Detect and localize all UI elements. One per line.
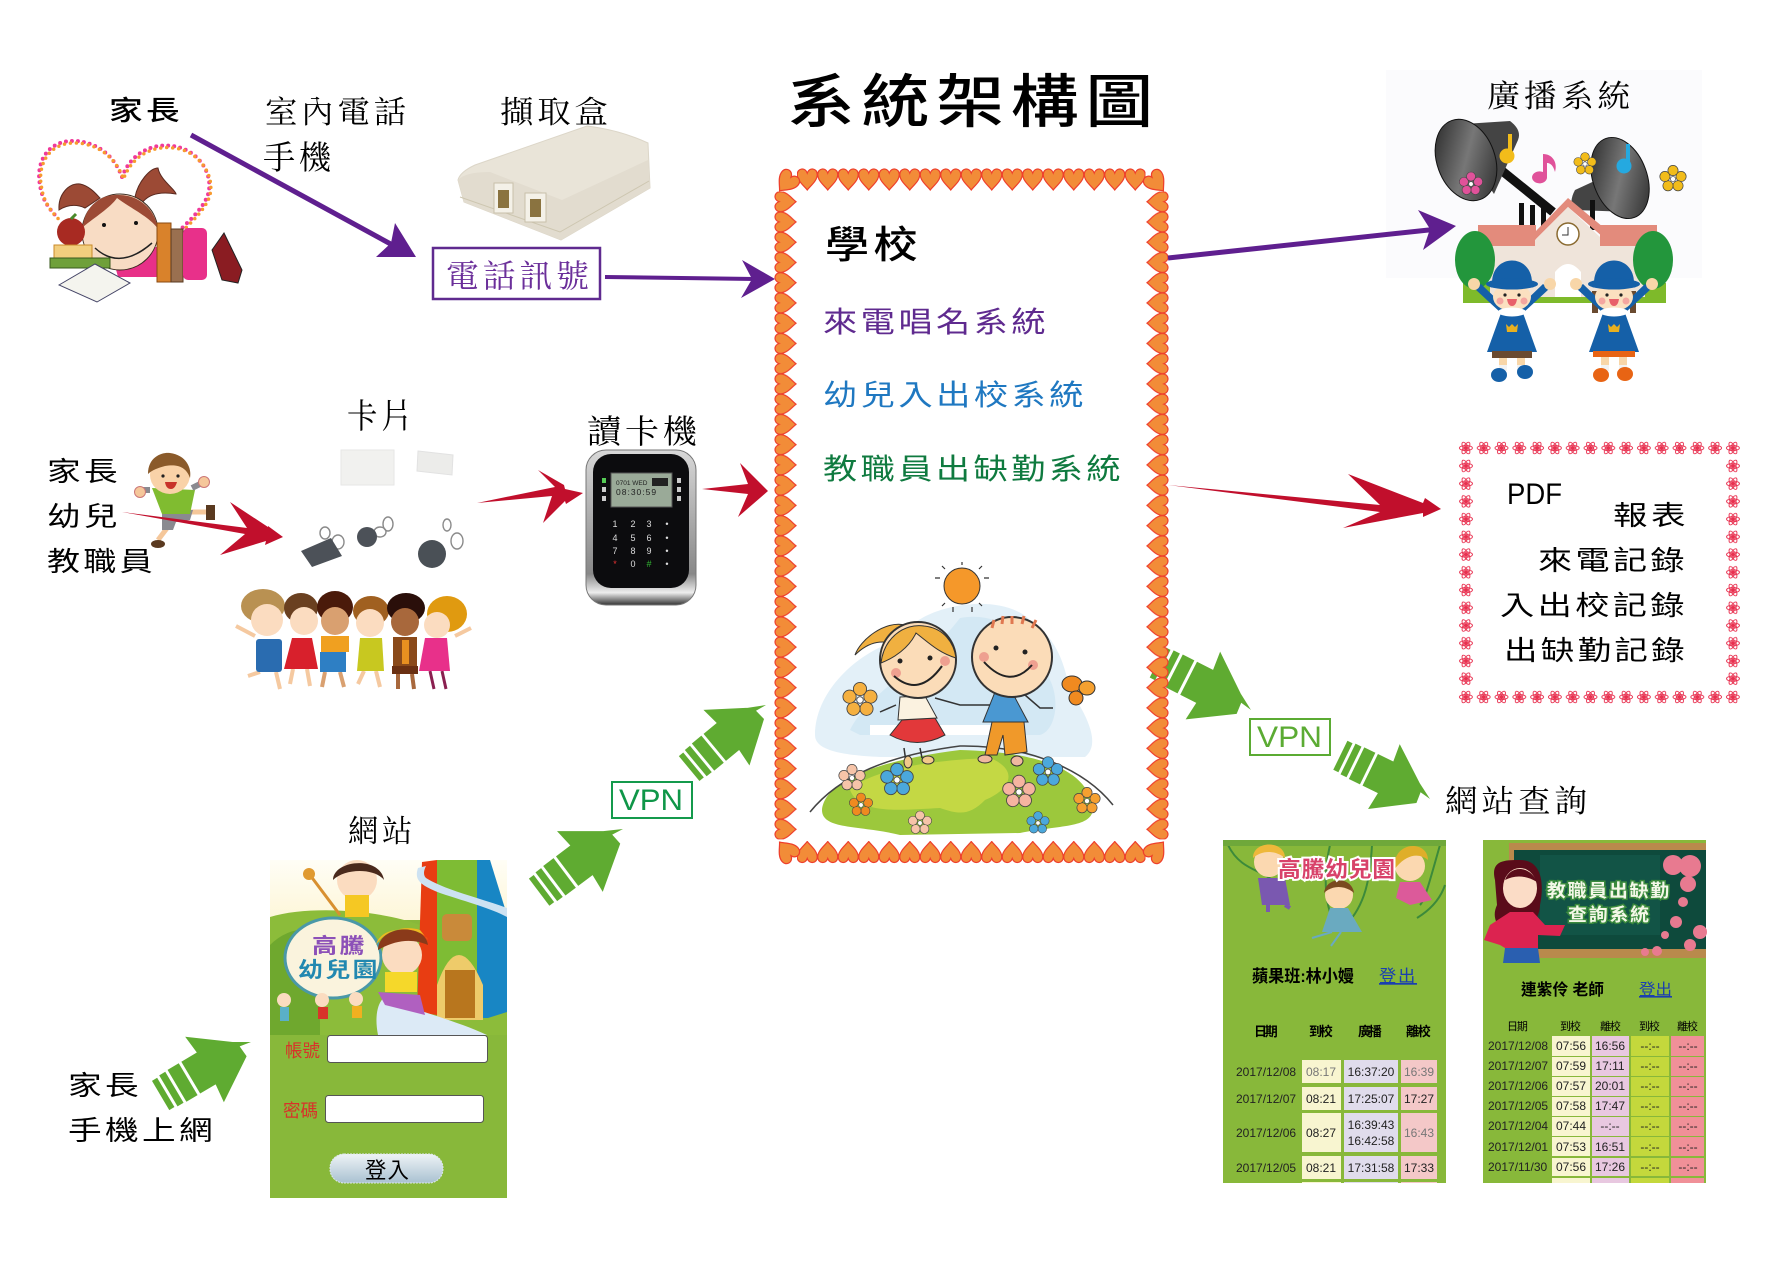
label: parent, child, staff	[47, 457, 156, 577]
attendance table: staff: 2017/12/04	[1488, 1119, 1548, 1133]
icon: running boy	[134, 453, 215, 548]
form: password field	[283, 1096, 484, 1122]
attendance table: staff: --:--	[1640, 1039, 1660, 1053]
label: parent: 家長	[109, 96, 183, 126]
attendance table: child: 08:27	[1306, 1126, 1336, 1140]
attendance table: child: 08:21	[1306, 1092, 1336, 1106]
icon: card reader device: •	[665, 519, 669, 529]
panel: PDF report	[1457, 439, 1742, 706]
label: PDF: PDF	[1507, 478, 1562, 511]
group: mobile website login	[68, 814, 507, 1198]
illustration: teacher and blackboard banner: 查詢系統	[1568, 904, 1651, 925]
attendance table: staff: --:--	[1678, 1039, 1698, 1053]
icon: card reader device: 7	[612, 546, 618, 556]
attendance table: staff: 2017/11/30	[1488, 1160, 1547, 1174]
icon: key fobs	[301, 517, 463, 568]
attendance table: staff: 17:11	[1595, 1059, 1625, 1073]
attendance table: staff: 07:44	[1556, 1119, 1586, 1133]
attendance table: child: 2017/12/06	[1236, 1126, 1296, 1140]
attendance table: child: 17:31:58	[1348, 1161, 1395, 1175]
illustration: fairy kids banner: 高騰幼兒園	[1278, 857, 1396, 882]
group: card identification input	[47, 398, 768, 689]
attendance table: child: 17:27	[1404, 1092, 1434, 1106]
label: parent mobile browsing: 家長	[68, 1071, 142, 1101]
attendance table: child: 17:33	[1404, 1161, 1434, 1175]
attendance table: staff: 2017/12/08	[1488, 1039, 1548, 1053]
arrow: cards to reader	[477, 470, 583, 523]
attendance table: staff	[1488, 1036, 1704, 1183]
icon: card reader device: 4	[612, 533, 618, 543]
attendance table: staff: 07:57	[1556, 1079, 1586, 1093]
icon: card reader device: •	[665, 546, 669, 556]
icon: card reader device: •	[665, 559, 669, 569]
attendance table: staff: 07:56	[1556, 1039, 1586, 1053]
attendance table: staff: --:--	[1678, 1140, 1698, 1154]
label: card reader: 讀卡機	[587, 414, 701, 451]
box: VPN right: VPN	[1257, 721, 1322, 754]
label: parent mobile browsing: 手機上網	[68, 1116, 216, 1146]
icon: music notes and flowers	[1459, 134, 1686, 194]
button: login	[330, 1154, 443, 1183]
arrow: school to broadcast	[1168, 210, 1456, 258]
panel: broadcast system	[1386, 70, 1702, 382]
attendance table: staff: 2017/12/07	[1488, 1059, 1548, 1073]
label: mobile: 手機	[263, 140, 335, 177]
link: logout: 登出	[1639, 981, 1672, 999]
attendance table: staff: --:--	[1640, 1059, 1660, 1073]
icon: card reader device: 0	[630, 559, 636, 569]
icon: card reader device: 9	[646, 546, 652, 556]
attendance table: child: 16:37:20	[1348, 1065, 1395, 1079]
label: landline and mobile phone: 室內電話	[265, 95, 410, 130]
label: attendance records: 出缺勤記錄	[1504, 636, 1688, 666]
icon: card reader device: •	[665, 533, 669, 543]
heading: school: 學校	[825, 225, 922, 267]
attendance table: child: 17:25:07	[1348, 1092, 1395, 1106]
form: account field: 帳號	[285, 1041, 320, 1061]
illustration: kindergarten banner	[270, 860, 507, 1035]
label: parent mobile browsing	[68, 1071, 216, 1146]
attendance table: staff: 17:47	[1595, 1099, 1625, 1113]
link: logout: 登出	[1379, 967, 1417, 986]
icon: white cards	[341, 450, 453, 485]
attendance table: child: 2017/12/08	[1236, 1065, 1296, 1079]
box: VPN left: VPN	[619, 784, 683, 817]
attendance table: staff: --:--	[1678, 1119, 1698, 1133]
attendance table: child: 2017/12/05	[1236, 1161, 1296, 1175]
attendance table: child: 16:39	[1404, 1065, 1434, 1079]
attendance table: child: 16:42:58	[1348, 1134, 1395, 1148]
label: parent, child, staff: 教職員	[47, 547, 156, 577]
box: phone signal: 電話訊號	[446, 258, 593, 294]
text: caller roll-call system: 來電唱名系統	[823, 306, 1049, 339]
attendance table: staff: 2017/12/05	[1488, 1099, 1548, 1113]
icon: two pupils cheering	[1468, 260, 1658, 382]
label: reports: 報表	[1613, 501, 1689, 531]
attendance table: staff: 16:51	[1595, 1140, 1625, 1154]
icon: card reader device: 08:30:59	[616, 487, 657, 497]
table header: 到校	[1309, 1024, 1334, 1039]
attendance table: staff: --:--	[1640, 1140, 1660, 1154]
attendance table: child: 16:43	[1404, 1126, 1434, 1140]
attendance table: staff: --:--	[1640, 1099, 1660, 1113]
attendance table: staff: --:--	[1678, 1160, 1698, 1174]
table header: 廣播	[1358, 1024, 1383, 1039]
table header	[1254, 1024, 1432, 1039]
label: call records: 來電記錄	[1538, 546, 1688, 576]
illustration: two children on a hill	[810, 562, 1113, 835]
icon: loudspeakers	[1424, 111, 1660, 230]
attendance table: staff: 07:58	[1556, 1099, 1586, 1113]
attendance table: staff: --:--	[1640, 1119, 1660, 1133]
table header: 離校	[1677, 1019, 1699, 1033]
icon: girl with books	[39, 141, 242, 302]
attendance table: child: 16:39:43	[1348, 1118, 1395, 1132]
icon: card reader device: *	[613, 559, 617, 569]
form: password field: 密碼	[283, 1101, 318, 1121]
attendance table: staff: --:--	[1678, 1099, 1698, 1113]
illustration: teacher and blackboard banner: 教職員出缺勤	[1547, 881, 1671, 901]
arrow: mobile to website	[141, 1009, 270, 1128]
label: website: 網站	[348, 814, 416, 849]
table header: 到校	[1639, 1019, 1661, 1033]
text: child attendance system: 幼兒入出校系統	[823, 379, 1087, 412]
attendance table: staff: 2017/12/01	[1488, 1140, 1548, 1154]
label: capture box: 擷取盒	[500, 95, 612, 130]
icon: telephone capture box	[458, 126, 650, 240]
arrow: VPN upper left	[666, 677, 789, 796]
attendance table: staff: 07:53	[1556, 1140, 1586, 1154]
icon: card reader device: #	[646, 559, 652, 569]
illustration: fairy kids banner	[1223, 840, 1446, 946]
panel: parent web query screenshot	[1223, 840, 1446, 1183]
heart border	[772, 167, 1171, 866]
attendance table: child: 2017/12/07	[1236, 1092, 1296, 1106]
label: parent, child, staff: 家長	[47, 457, 121, 487]
attendance table: staff: 16:56	[1595, 1039, 1625, 1053]
text: teacher name: 連紫伶 老師	[1521, 980, 1604, 999]
arrow: VPN to website query	[1325, 723, 1446, 831]
label: parent, child, staff: 幼兒	[47, 502, 121, 532]
title: 系統架構圖	[787, 70, 1160, 135]
table header: 日期	[1507, 1020, 1529, 1033]
attendance table: staff: 20:01	[1595, 1079, 1625, 1093]
illustration: kindergarten banner: 幼兒園	[298, 959, 380, 982]
illustration: teacher and blackboard banner	[1484, 843, 1707, 963]
icon: card reader device: 6	[646, 533, 652, 543]
label: entry and exit records: 入出校記錄	[1500, 591, 1688, 621]
panel: school	[772, 167, 1171, 866]
attendance table: child	[1236, 1060, 1437, 1183]
arrow: phone signal to school	[605, 260, 775, 298]
attendance table: staff: --:--	[1640, 1079, 1660, 1093]
panel: login page	[270, 860, 507, 1198]
arrow: school to PDF report	[1168, 474, 1441, 528]
attendance table: staff: 07:59	[1556, 1059, 1586, 1073]
button: login: 登入	[365, 1158, 410, 1183]
icon: card reader device: 3	[646, 519, 652, 529]
table header: 離校	[1600, 1019, 1622, 1033]
attendance table: staff: 2017/12/06	[1488, 1079, 1548, 1093]
table header: 日期	[1254, 1024, 1279, 1039]
arrow: school to VPN right	[1140, 628, 1268, 744]
attendance table: staff: 07:56	[1556, 1160, 1586, 1174]
table header: 到校	[1560, 1019, 1582, 1033]
arrow: people to cards	[122, 502, 283, 555]
icon: card reader device: 0701 WED	[616, 480, 648, 487]
table header: 離校	[1406, 1024, 1432, 1039]
label: website query: 網站查詢	[1445, 784, 1591, 819]
icon: group of children	[236, 589, 471, 689]
attendance table: staff: --:--	[1600, 1119, 1620, 1133]
flower border	[1457, 439, 1742, 706]
text: staff attendance system: 教職員出缺勤系統	[823, 453, 1124, 486]
label: cards: 卡片	[347, 398, 415, 436]
panel: staff web query screenshot	[1483, 840, 1707, 1183]
arrow: parent to phone signal	[191, 135, 416, 257]
arrow: VPN lower left	[516, 799, 646, 923]
attendance table: staff: --:--	[1678, 1059, 1698, 1073]
attendance table: child: 08:17	[1306, 1065, 1336, 1079]
box: phone signal	[433, 248, 600, 299]
arrow: reader to school	[702, 463, 768, 517]
attendance table: staff: --:--	[1640, 1160, 1660, 1174]
illustration: kindergarten banner: 高騰	[312, 934, 367, 958]
icon: card reader device: 1	[612, 519, 618, 529]
icon: card reader device	[586, 450, 696, 605]
text: class and child name: 蘋果班:林小嫚	[1252, 967, 1354, 986]
form: account field	[285, 1036, 488, 1062]
icon: card reader device: 2	[630, 519, 636, 529]
icon: card reader device: 8	[630, 546, 636, 556]
attendance table: staff: 17:26	[1595, 1160, 1625, 1174]
label: broadcast system: 廣播系統	[1487, 79, 1634, 114]
group: parent telephone input	[39, 95, 775, 302]
icon: school building	[1455, 198, 1673, 303]
table header	[1507, 1019, 1699, 1033]
attendance table: staff: --:--	[1678, 1079, 1698, 1093]
attendance table: child: 08:21	[1306, 1161, 1336, 1175]
panel background	[1386, 70, 1702, 278]
icon: card reader device: 5	[630, 533, 636, 543]
